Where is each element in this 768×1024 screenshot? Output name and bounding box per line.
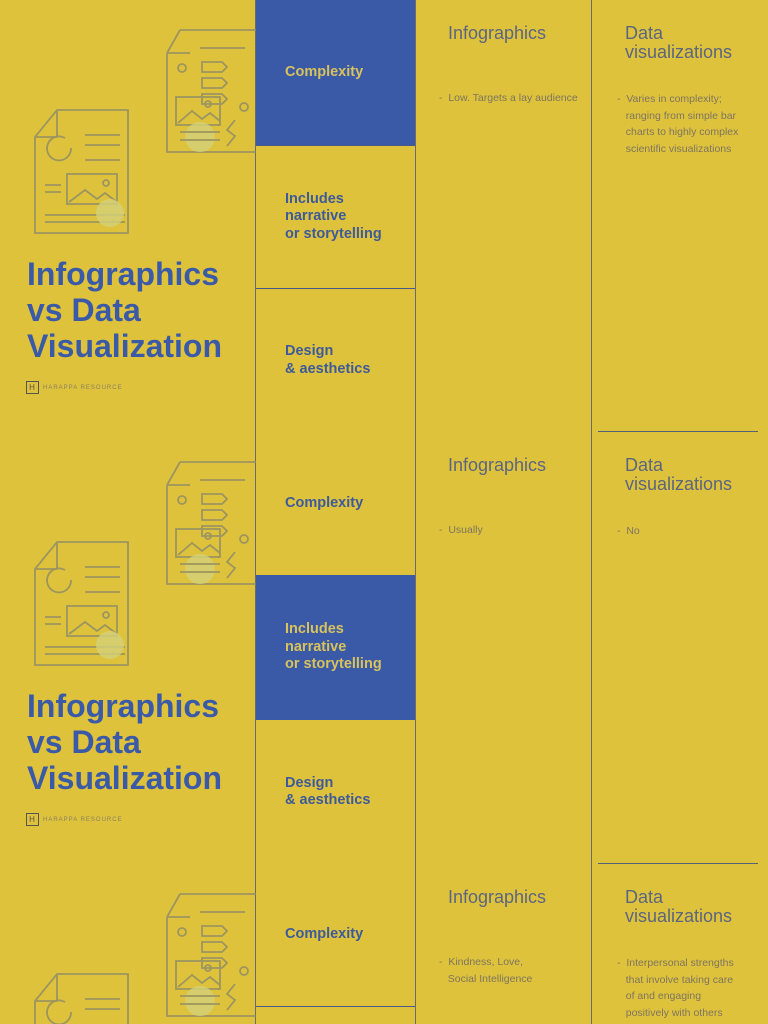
logo	[26, 381, 123, 394]
logo: H	[29, 383, 36, 392]
cell: complexity: Complexity	[285, 64, 363, 80]
logo: HARAPPA RESOURCE	[43, 816, 123, 822]
data viz column: Data	[625, 455, 663, 475]
logo: H	[29, 815, 36, 824]
cell: narrative: or storytelling	[285, 656, 382, 672]
cell: complexity: Complexity	[285, 495, 363, 511]
cell: design	[256, 288, 415, 432]
infographics column: Infographics	[448, 23, 546, 43]
infographics column: - Usually	[439, 524, 483, 536]
data viz column: that involve taking care	[626, 974, 733, 986]
data viz column: visualizations	[625, 474, 732, 494]
infographics column	[439, 455, 546, 536]
cell: design	[285, 774, 370, 808]
icons: documents	[34, 461, 256, 666]
slide 2	[26, 455, 758, 864]
title: vs Data	[27, 724, 141, 760]
title: Visualization	[27, 328, 222, 364]
cell: complexity: Complexity	[285, 926, 363, 942]
data viz column: visualizations	[625, 42, 732, 62]
cell: complexity	[256, 0, 415, 145]
cell: narrative	[256, 145, 415, 288]
infographics column: Infographics	[448, 887, 546, 907]
data viz column: ranging from simple bar	[626, 110, 736, 122]
data viz column: - Varies in complexity;	[617, 93, 722, 105]
infographics column: - Kindness, Love,	[439, 956, 523, 968]
data viz column: - Interpersonal strengths	[617, 957, 734, 969]
data viz column: - No	[617, 525, 640, 537]
data viz column: of and engaging	[626, 990, 701, 1002]
infographics column: Social Intelligence	[448, 972, 532, 984]
cell: design: Design	[285, 774, 333, 790]
infographics column: Infographics	[448, 455, 546, 475]
title: Infographics	[27, 256, 219, 292]
icons: documents	[34, 29, 256, 234]
vertical divider lines	[255, 0, 256, 1024]
cell: narrative	[256, 575, 415, 720]
icons: documents	[34, 893, 256, 1024]
slide 1	[26, 0, 758, 432]
data viz column: visualizations	[625, 906, 732, 926]
infographics column: - Low. Targets a lay audience	[439, 92, 578, 104]
data viz column: positively with others	[626, 1006, 723, 1018]
title: vs Data	[27, 292, 141, 328]
data viz column	[617, 887, 734, 1018]
title	[27, 256, 222, 364]
data viz column	[617, 455, 732, 537]
logo	[26, 813, 123, 826]
cell: design: & aesthetics	[285, 792, 370, 808]
data viz column: charts to highly complex	[626, 126, 738, 138]
infographics column	[439, 23, 578, 104]
cell: design: Design	[285, 343, 333, 359]
title: Visualization	[27, 760, 222, 796]
title	[27, 688, 222, 796]
cell: design: & aesthetics	[285, 360, 370, 376]
title: Infographics	[27, 688, 219, 724]
cell: narrative: Includes	[285, 621, 344, 637]
infographics column	[439, 887, 546, 984]
data viz column	[617, 23, 738, 154]
cell: narrative: narrative	[285, 208, 346, 224]
slide 3	[34, 887, 734, 1024]
cell: narrative: narrative	[285, 639, 346, 655]
cell: complexity	[256, 864, 415, 1007]
cell: narrative: Includes	[285, 191, 344, 207]
logo: HARAPPA RESOURCE	[43, 384, 123, 390]
data viz column: Data	[625, 23, 663, 43]
cell: narrative: or storytelling	[285, 226, 382, 242]
data viz column: scientific visualizations	[626, 142, 731, 154]
data viz column: Data	[625, 887, 663, 907]
